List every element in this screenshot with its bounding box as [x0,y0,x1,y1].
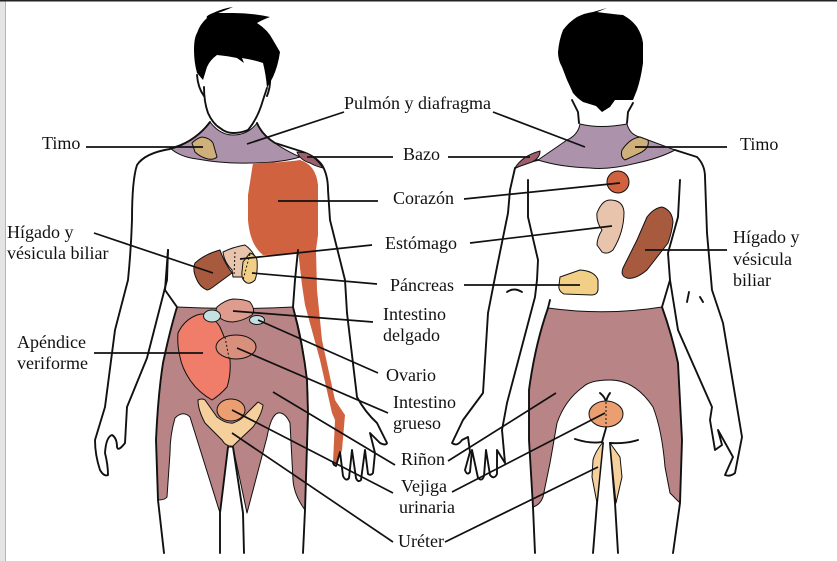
icon: páncreas back [559,270,598,295]
front outline [95,122,210,475]
label: Apéndice veriforme: veriforme [17,353,88,373]
back pelvis and thighs region [529,307,682,507]
icon: intestino grueso front [216,335,256,359]
icon: apéndice front [178,314,230,400]
label: Estómago: Estómago [385,233,457,253]
label: Hígado y vésicula biliar left: Hígado y [7,222,74,242]
icon: uréter front [198,399,263,446]
front chest pain region [248,160,318,255]
label: Intestino grueso: grueso [393,413,441,433]
label: Timo right: Timo [740,134,778,154]
label: Vejiga urinaria: urinaria [399,497,455,517]
icon: ovarios front [204,310,264,324]
back shoulder region [538,124,675,168]
back outline [452,160,538,480]
label: Páncreas: Páncreas [390,275,454,295]
label: Bazo: Bazo [403,144,440,164]
icon: hígado front [194,250,232,290]
icon: corazón back [607,171,629,193]
icon: estómago front [223,245,255,277]
icon: intestino delgado front [216,299,254,322]
front hair [194,7,280,88]
icon: timo front [192,137,217,159]
label: Riñon: Riñon [401,449,445,469]
front shoulder region [170,122,300,163]
figure: back body [452,8,742,553]
icon: vejiga back [589,401,623,427]
label: Hígado y vésicula biliar right: vésicula [733,249,792,269]
icon: bazo front [297,152,323,168]
label: Uréter: Uréter [398,531,444,551]
label: Timo left: Timo [42,133,80,153]
label: Ovario: Ovario [386,365,436,385]
icon: estómago back [597,200,624,253]
icon: bazo back [515,151,540,168]
front face [204,87,267,133]
label: Pulmón y diafragma: Pulmón y diafragma [344,93,491,113]
front pelvis and thighs region [156,307,308,513]
label: Intestino delgado: Intestino [383,304,446,324]
label: Vejiga urinaria: Vejiga [401,476,447,496]
icon: timo back [621,137,648,160]
figure: front body [95,7,387,553]
front arm pain strip [298,250,345,465]
label: Apéndice veriforme: Apéndice [17,332,86,352]
leader lines [86,112,727,542]
icon: páncreas front [242,253,257,283]
icon: uréter back [592,442,622,503]
icon: vejiga front [217,399,245,421]
label: Hígado y vésicula biliar left: vésicula biliar [7,243,108,263]
label: Hígado y vésicula biliar right: biliar [733,270,771,290]
icon: hígado back [622,207,673,278]
label: Intestino delgado: delgado [383,325,440,345]
label: Hígado y vésicula biliar right: Hígado y [733,227,800,247]
label: Intestino grueso: Intestino [393,392,456,412]
label: Corazón: Corazón [393,188,454,208]
back hair [558,8,643,112]
